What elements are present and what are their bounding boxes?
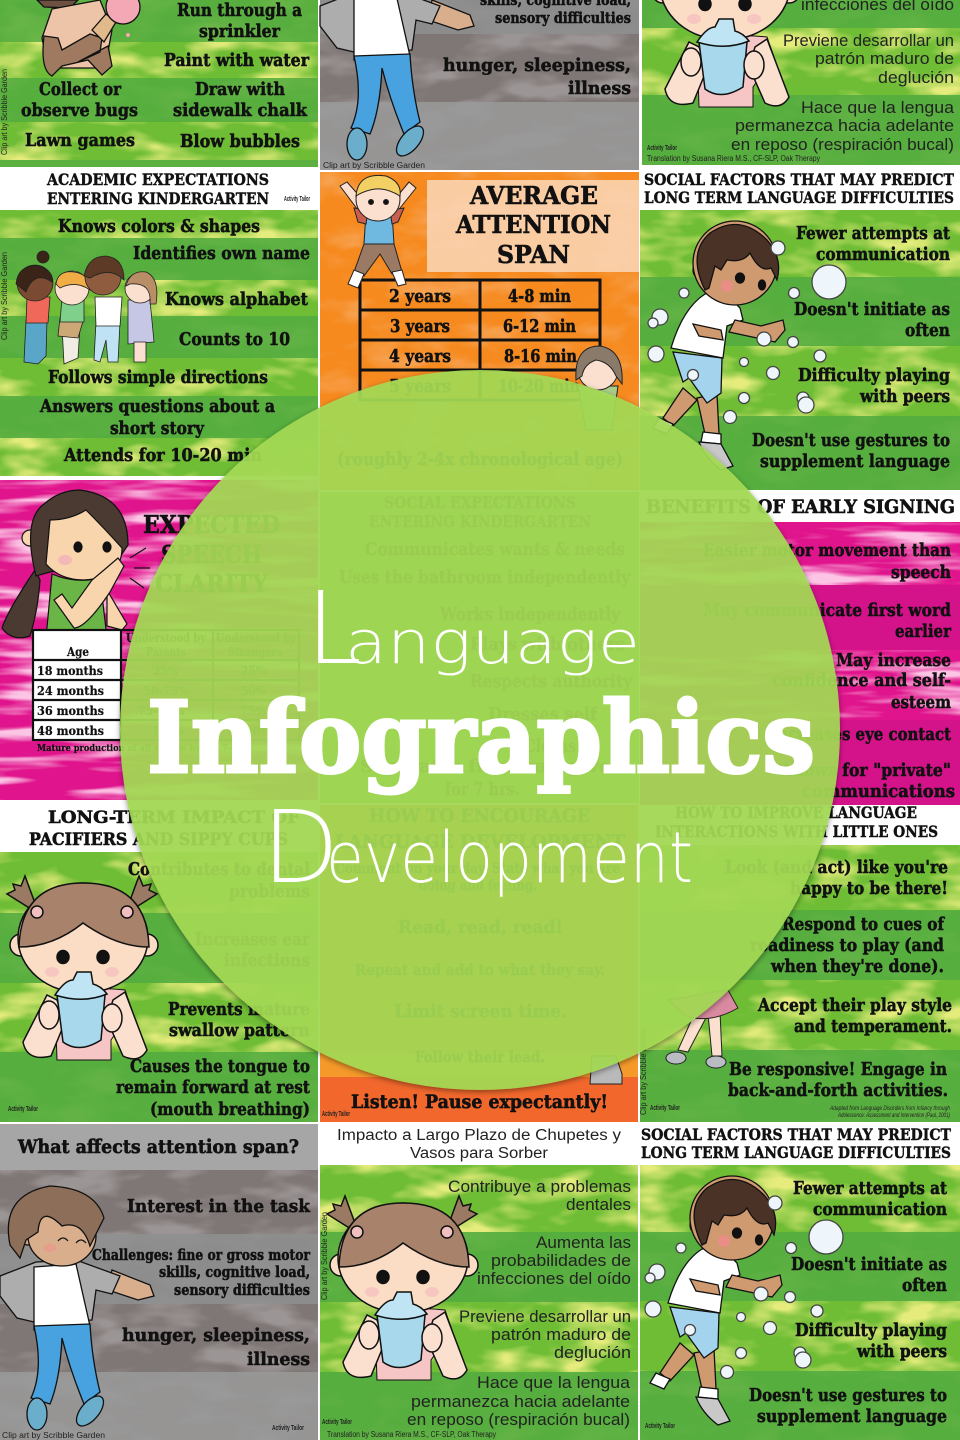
heading box: ATTENTION (455, 210, 611, 239)
table: clarity by age: 18 months (37, 664, 103, 678)
icon: girl in pink dress (666, 990, 738, 1068)
text: impact list spanish: permanezca hacia adelante (411, 1393, 630, 1411)
logo: Activity Tailor (8, 1106, 38, 1113)
text: expectations list: Knows colors & shapes (58, 216, 260, 237)
table: clarity by age: 50-75% (143, 684, 190, 698)
text: impact list spanish: Previene desarrollar un (459, 1308, 631, 1326)
icon: girl with ice cream (37, 0, 140, 76)
text: impact list: swallow pattern (169, 1020, 310, 1041)
text: social list: for 7 hrs. (445, 779, 520, 800)
note: mature production: Mature production of all sounds by age 7-8 (37, 744, 237, 754)
text: impact list spanish: dentales (566, 1196, 631, 1214)
text: expectations list (39, 216, 310, 466)
credit: translation: Translation by Susana Riera M.S., CF-SLP, Oak Therapy (647, 154, 820, 163)
panel: how to improve language interactions (639, 803, 960, 1122)
panel: impacto spanish (320, 1122, 638, 1440)
table: clarity by age: 48 months (37, 724, 104, 738)
text: social list: Plays with others (470, 634, 625, 655)
heading: What affects attention span? (17, 1136, 299, 1158)
text: impact list spanish (407, 1178, 631, 1429)
text: tips: Comment on your day. State what you are (335, 861, 620, 877)
heading: LONG-TERM IMPACT OF (48, 808, 300, 828)
text: social list: Cleans up (525, 736, 600, 757)
text: factors: with peers (856, 1341, 947, 1362)
table: attention by age: 8-16 min (504, 346, 577, 367)
text: social list: Respects authority (470, 671, 632, 692)
table: clarity by age: 75-90% (138, 704, 185, 718)
icon: boy with bubbles (645, 1176, 843, 1425)
text: activity list: Lawn games (25, 130, 135, 151)
logo: Activity Tailor (272, 1425, 304, 1432)
logo: Activity Tailor (645, 1423, 675, 1430)
icon: girl with hand at mouth (2, 490, 150, 638)
callout: listen: Listen! Pause expectantly! (351, 1091, 608, 1113)
text: factors: often (905, 320, 950, 341)
icon: small girl (576, 346, 622, 430)
text: impact list spanish: deglución (554, 1344, 631, 1362)
icon: blond boy jumping (340, 175, 416, 288)
panel: attention span continued (top) (320, 0, 639, 170)
heading (335, 805, 625, 853)
text: impact list spanish: Previene desarrollar un (783, 32, 954, 50)
heading box: SPAN (497, 240, 570, 269)
icon: figure pointing (590, 1056, 622, 1084)
text: activity list (21, 0, 309, 152)
table: attention by age: 4-8 min (508, 286, 571, 307)
text: factors: illness (568, 78, 631, 99)
heading (46, 170, 269, 208)
heading box (427, 180, 639, 272)
text: social list: Separates from caregiver (360, 756, 621, 777)
text: benefits list: speech (891, 562, 951, 583)
table: clarity by age: 25% (153, 664, 179, 678)
text: activity list: Run through a (177, 0, 302, 21)
text: tips: doing and feeling. (419, 878, 537, 894)
panel: average attention span (320, 172, 639, 490)
table: clarity by age: 100% (152, 724, 185, 738)
text: impact list spanish: Hace que la lengua (477, 1374, 631, 1392)
text: impact list spanish: infecciones del oído (477, 1270, 631, 1288)
text: impact list: Prevents mature (168, 999, 310, 1020)
text: impact list: Causes the tongue to (130, 1056, 310, 1077)
logo: Activity Tailor (284, 196, 310, 203)
heading (644, 170, 954, 207)
text: impact list spanish: deglución (878, 69, 954, 87)
heading: HOW TO ENCOURAGE (369, 805, 590, 827)
heading: ACADEMIC EXPECTATIONS (46, 170, 269, 189)
text: impact list spanish: permanezca hacia adelante (735, 117, 954, 135)
table: attention by age: 5 years (389, 376, 451, 397)
heading (641, 1125, 951, 1162)
text: activity list: sidewalk chalk (173, 100, 307, 121)
text: factors: sensory difficulties (495, 9, 631, 27)
table: clarity by age: Parents (146, 645, 186, 659)
panel: expected speech clarity (0, 480, 318, 800)
text: activity list: Collect or (39, 79, 121, 100)
text: impact list spanish: en reposo (respiración bucal) (731, 136, 954, 154)
heading: SPEECH (161, 540, 262, 569)
heading: Vasos para Sorber (410, 1145, 548, 1162)
panel: benefits of early signing (640, 490, 960, 805)
text: expectations list: Answers questions about a (39, 396, 275, 417)
table: clarity by age: 100% (238, 724, 271, 738)
text: impact list: remain forward at rest (116, 1077, 311, 1098)
heading: SOCIAL EXPECTATIONS (384, 493, 576, 512)
text: benefits list (703, 540, 955, 802)
panel: social factors (640, 168, 960, 490)
heading: LANGUAGE DEVELOPMENT (335, 831, 625, 853)
icon: boy jumping (0, 1186, 154, 1431)
text: impact list spanish: patrón maduro de (815, 50, 954, 68)
logo: Activity Tailor (322, 1419, 352, 1426)
panel: social factors repeated (bottom) (640, 1123, 960, 1440)
text: factors: hunger, sleepiness, (443, 55, 631, 76)
credit: clip art: Clip art by Scribble Garden (0, 252, 9, 340)
table: clarity by age: Age (66, 645, 89, 659)
icon: child with sippy cup (7, 876, 158, 1060)
text: social list (339, 539, 632, 800)
heading (29, 808, 300, 850)
panel: pacifiers and sippy cups (0, 803, 318, 1122)
text: expectations list: Knows alphabet (165, 289, 309, 310)
panel: what affects attention span (0, 1124, 318, 1440)
credit: source (829, 1106, 951, 1119)
heading (655, 803, 938, 841)
text: factors (749, 1178, 948, 1427)
text: factors (752, 223, 951, 472)
credit: clip art: Clip art by Scribble Garden (639, 1027, 648, 1115)
text: tips: Repeat and add to what they say. (355, 961, 605, 979)
text: expectations list: short story (110, 418, 204, 439)
panel: outdoor activities (0, 0, 318, 167)
credit: clip art: Clip art by Scribble Garden (320, 1212, 329, 1300)
text: impact list: problems (229, 881, 310, 902)
text: activity list: Draw with (195, 79, 285, 100)
table: attention by age: 4 years (389, 346, 451, 367)
table: clarity by age: Understood by (216, 631, 297, 645)
table: clarity by age: Understood by (126, 631, 207, 645)
table: clarity by age: 50% (241, 684, 267, 698)
heading: ENTERING KINDERGARTEN (369, 512, 591, 531)
heading: PACIFIERS AND SIPPY CUPS (29, 830, 288, 850)
table: clarity by age (33, 630, 299, 740)
text: social list: Dresses self (488, 704, 598, 725)
table: attention by age: 6-12 min (503, 316, 576, 337)
icon: child with sippy cup (327, 1196, 478, 1380)
text: impact list: Contributes to dental (128, 859, 310, 880)
text: impact list: (mouth breathing) (150, 1099, 310, 1120)
heading (369, 493, 591, 531)
panel: social expectations (320, 492, 639, 803)
credit: translation: Translation by Susana Riera M.S., CF-SLP, Oak Therapy (327, 1430, 496, 1439)
text: factors (443, 0, 631, 99)
text: social list: Communicates wants & needs (365, 539, 625, 560)
text: tips (725, 857, 952, 1101)
heading (143, 510, 280, 598)
text: social list: Works independently (439, 604, 620, 625)
table: clarity by age: 25% (241, 664, 267, 678)
text: tips: Limit screen time. (394, 1001, 567, 1022)
title: Language: L (306, 570, 362, 687)
title: Infographics: Infographics (147, 681, 815, 796)
text: expectations list: Identifies own name (133, 243, 310, 264)
text: factors: skills, cognitive load, (159, 1263, 310, 1281)
table: clarity by age: 36 months (37, 704, 104, 718)
title circle (120, 370, 840, 1090)
table: attention by age: 2 years (389, 286, 451, 307)
credit: clip art: Clip art by Scribble Garden (0, 69, 9, 155)
heading box: AVERAGE (469, 181, 598, 210)
text: impact list: Increases ear (195, 929, 310, 950)
text: expectations list: Attends for 10-20 min (63, 445, 262, 466)
title: Development: D (262, 789, 339, 906)
text: impact list (116, 859, 311, 1120)
text: social list: Uses the bathroom independently (339, 567, 630, 588)
text: factors (92, 1196, 311, 1370)
text: impact list spanish: probabilidades de (491, 1252, 631, 1270)
icon: four children (16, 251, 157, 364)
note: chronological age: (roughly 2-4x chronological age) (337, 449, 623, 470)
credit: clip art: Clip art by Scribble Garden (2, 1431, 105, 1440)
heading: HOW TO IMPROVE LANGUAGE (675, 803, 917, 822)
text: factors: Challenges: fine or gross motor (92, 1246, 311, 1264)
text: impact list spanish: Aumenta las (536, 1234, 631, 1252)
text: factors: illness (247, 1349, 310, 1370)
text: factors: Interest in the task (127, 1196, 310, 1217)
heading: ENTERING KINDERGARTEN (47, 189, 269, 208)
heading (337, 1127, 621, 1162)
panel: academic expectations (0, 168, 318, 476)
table: attention by age: 10-20 min (498, 376, 580, 397)
text: factors: hunger, sleepiness, (122, 1325, 310, 1346)
logo: Activity Tailor (650, 1105, 680, 1112)
text: activity list: sprinkler (199, 21, 280, 42)
text: expectations list: Follows simple directions (48, 367, 268, 388)
text: tips: Read, read, read! (398, 917, 563, 938)
table: clarity by age: 24 months (37, 684, 104, 698)
title: Language: anguage (345, 608, 640, 678)
table: clarity by age: 75% (241, 704, 267, 718)
heading: CLARITY (155, 569, 269, 598)
logo: Activity Tailor (322, 1111, 350, 1118)
text: impact list spanish: Hace que la lengua (801, 99, 955, 117)
text: impact list: infections (224, 950, 310, 971)
text: impact list spanish: en reposo (respiración bucal) (407, 1411, 630, 1429)
table: clarity by age: Strangers (228, 645, 282, 659)
text: activity list: observe bugs (21, 100, 138, 121)
title: Development: evelopment (326, 817, 693, 899)
text: impact list spanish: Contribuye a problemas (448, 1178, 631, 1196)
panel: spanish continued (top right) (642, 0, 960, 165)
text: factors: often (902, 1275, 947, 1296)
text: impact list spanish: patrón maduro de (491, 1326, 631, 1344)
table: attention by age (360, 280, 600, 400)
credit: clip art: Clip art by Scribble Garden (323, 161, 425, 170)
heading: Impacto a Largo Plazo de Chupetes y (337, 1127, 621, 1144)
text: activity list: Blow bubbles (180, 131, 300, 152)
heading: EXPECTED (143, 510, 280, 539)
logo: Activity Tailor (647, 145, 677, 152)
text: activity list: Paint with water (164, 50, 309, 71)
icon: boy jumping (320, 0, 474, 161)
text: factors: sensory difficulties (174, 1281, 310, 1299)
icon: boy with bubbles (648, 221, 846, 470)
panel: how to encourage language development (320, 805, 638, 1122)
text: impact list spanish (731, 0, 955, 154)
text: expectations list: Counts to 10 (179, 329, 290, 350)
icon: child with sippy cup (649, 0, 800, 107)
text: tips: Follow their lead. (415, 1048, 545, 1066)
text: tips (335, 861, 620, 1066)
table: attention by age: 3 years (390, 316, 450, 337)
